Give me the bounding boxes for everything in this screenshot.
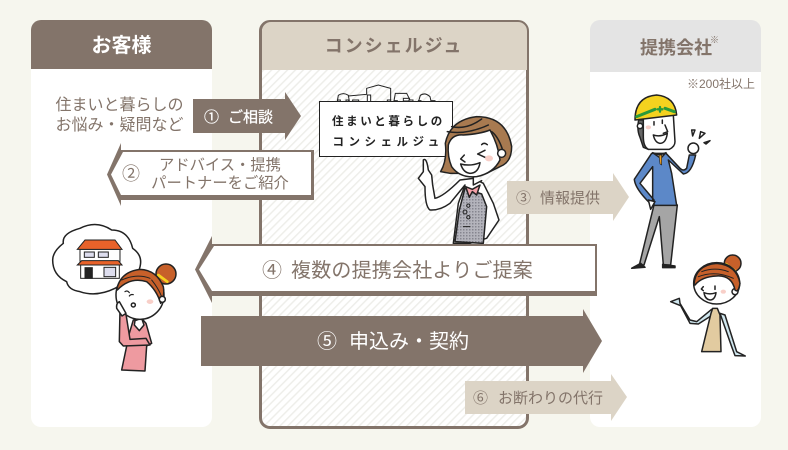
arrow 1: consultation [193,92,301,140]
arrow 2: advice and partner introduction [107,143,314,206]
arrow 6: refusal on your behalf: ⑥ [473,390,488,407]
illustration: thought bubble with house [53,225,141,294]
illustration: worker man [632,95,710,268]
arrow 3: information: ③ [516,190,531,207]
partner header: ※ [710,35,719,45]
panel: concierge [260,22,528,428]
partner header [590,20,761,72]
customer concerns text [55,96,184,134]
customer concerns text: お悩み・疑問など [55,116,184,134]
concierge header [262,22,527,70]
icon: house [77,240,122,278]
arrow 5: application and contract: ⑤ [317,330,337,353]
arrow 6: refusal on your behalf [465,374,627,421]
illustration: thinking woman [116,264,176,371]
arrow 3: information: 情報提供 [540,190,600,207]
panel: partner companies [590,20,761,427]
arrow 2: advice and partner introduction: パートナーをご紹介 [151,175,289,192]
arrow 5: application and contract: 申込み・契約 [349,330,469,353]
concierge sign [320,85,452,156]
concierge sign: コンシェルジュ [332,136,444,148]
illustration: concierge woman [418,117,512,243]
concierge header: コンシェルジュ [325,36,463,56]
arrow 4: multiple proposals [195,236,597,303]
arrow 5: application and contract [201,309,602,373]
concierge sign: 住まいと暮らしの [332,114,445,128]
arrow 4: multiple proposals: 複数の提携会社よりご提案 [291,259,533,282]
arrow 2: advice and partner introduction: アドバイス・提携 [159,157,281,174]
arrow 1: consultation: ご相談 [228,109,273,126]
customer header: お客様 [92,34,152,57]
arrow 6: refusal on your behalf: お断わりの代行 [498,390,603,407]
panel: customer [31,20,212,427]
arrow 1: consultation: ① [204,109,219,126]
partner count note: ※200社以上 [687,76,755,91]
customer concerns text: 住まいと暮らしの [55,96,184,114]
customer header [31,20,212,69]
arrow 4: multiple proposals: ④ [262,259,282,282]
arrow 2: advice and partner introduction: ② [122,164,140,184]
illustration: apron woman [671,255,745,356]
partner header: 提携会社 [640,37,712,58]
arrow 3: information [507,173,629,221]
